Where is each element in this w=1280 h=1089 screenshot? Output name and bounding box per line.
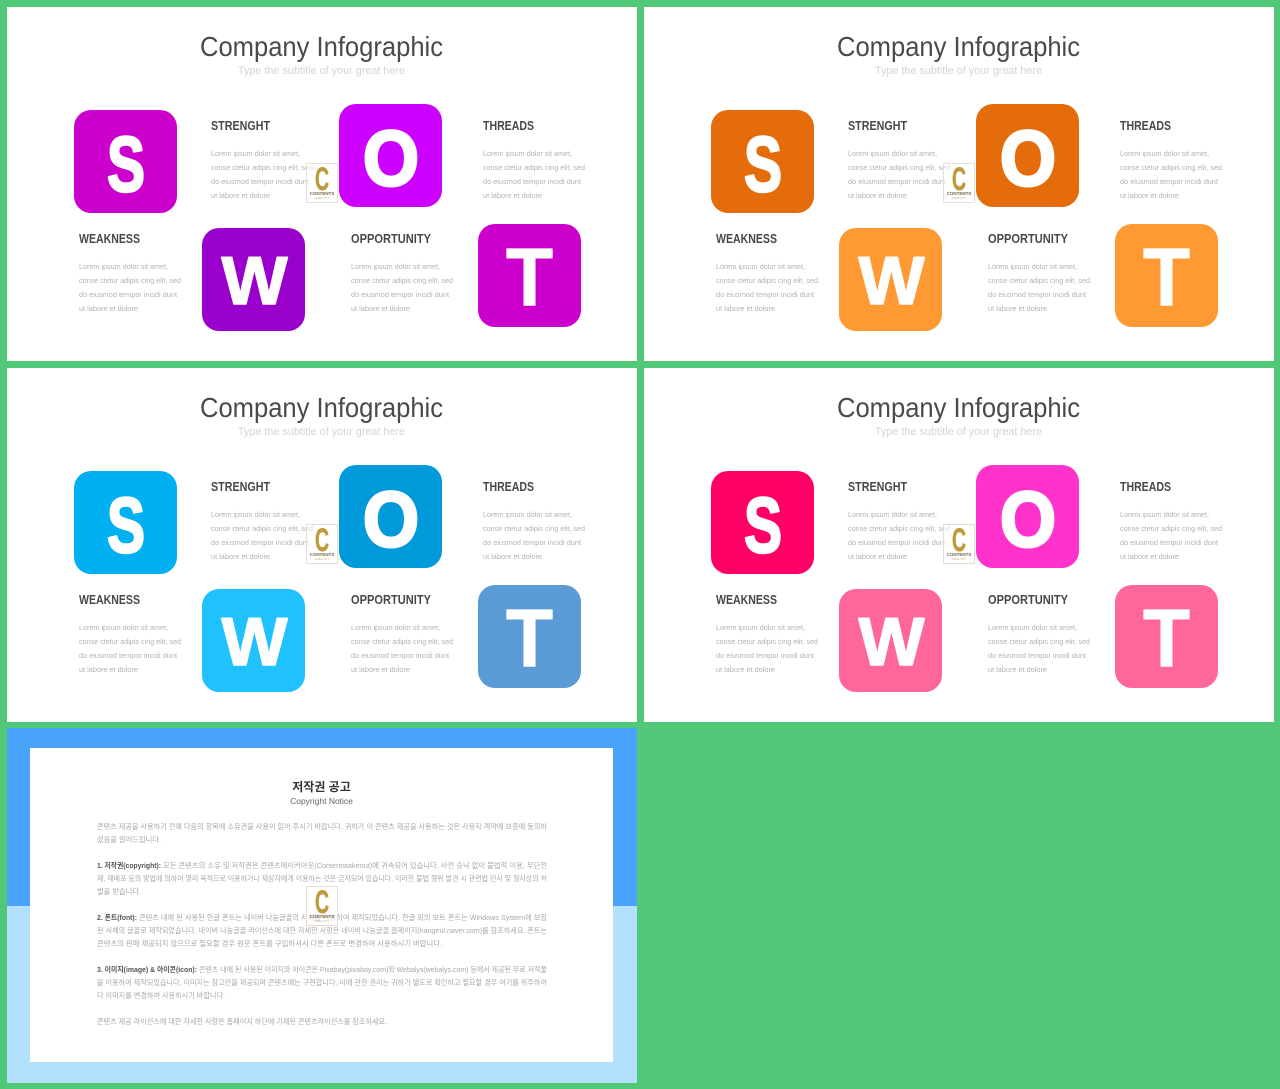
text block: weakness: conse ctetur adipis cing elit, sed [716,637,818,646]
text block: threads: Lorem ipsum dolor sit amet, [483,149,572,158]
text block: threads: THREADS [1120,480,1171,494]
text block: strenght: do eiusmod tempor incidi dunt [848,177,947,186]
tile T: T [506,232,553,323]
notice intro: 콘텐츠 제공을 사용하기 전에 다음의 항목에 소유권을 사용이 읽어 주시기 바랍니다. 귀하가 이 콘텐츠 제공을 사용하는 것은 사용자 계약에 보증에 동의하 [97,821,547,831]
notice section 2: font: 콘텐츠 내에 된 사용된 한글 폰트는 네이버 나눔글꼴의 서체를 사용하여 제작되었습니다. 한글 외의 보트 폰트는 Windows System에 보장 [139,912,547,922]
text block: strenght: conse ctetur adipis cing elit, sed [848,524,950,533]
text block: opportunity: conse ctetur adipis cing elit, sed [351,276,453,285]
tile W [839,228,942,331]
icon: contents logo stamp: FREE PPT [952,557,967,561]
tile O: O [363,114,419,202]
text block: opportunity: OPPORTUNITY [351,232,432,246]
title: Company Infographic [200,392,443,423]
text block: strenght [848,119,950,200]
notice section 1: copyright: 벌을 받습니다. [97,886,141,896]
text block: opportunity: do eiusmod tempor incidi dunt [988,651,1087,660]
text block: weakness: ut labore et dolore [79,665,138,674]
text block: threads: THREADS [483,480,534,494]
panel: orange SWOT slide [644,7,1274,361]
notice section 3: image and icon: 다 이미지를 변경하여 사용하시기 바랍니다. [97,990,225,1000]
text block: strenght: do eiusmod tempor incidi dunt [848,538,947,547]
tile O [976,465,1079,568]
text block: threads [1120,480,1222,561]
text block: weakness [716,593,818,674]
text block: strenght: do eiusmod tempor incidi dunt [211,177,310,186]
text block: strenght: Lorem ipsum dolor sit amet, [211,510,300,519]
notice intro [97,821,547,844]
notice section 3: image and icon: 콘텐츠 내에 된 사용된 이미지와 아이콘은 Pixabay(pixabay.com)와 Webalys(webalys.com) 등에서 제공된 무료 저작물 [199,964,547,974]
text block: opportunity: ut labore et dolore [988,304,1047,313]
tile S [711,471,814,574]
text block: weakness: WEAKNESS [716,232,777,246]
text block: threads: conse ctetur adipis cing elit, sed [1120,163,1222,172]
notice section 3: image and icon: 을 이용하여 제작되었습니다. 이미지는 참고만을 제공되며 콘텐츠에는 구현합니다. 이에 관한 권리는 귀하가 별도로 확인하고 필요할 경우 여기를 위주하여 [97,977,547,987]
notice section 1: copyright: 1. 저작권(copyright): [97,860,161,870]
tile W [839,589,942,692]
text block: strenght: conse ctetur adipis cing elit, sed [211,524,313,533]
icon: contents logo stamp: CONTENTS [310,914,334,919]
text block: weakness: conse ctetur adipis cing elit, sed [79,276,181,285]
tile W [202,589,305,692]
text block: threads [483,480,585,561]
text block: opportunity: do eiusmod tempor incidi dunt [988,290,1087,299]
tile O [976,104,1079,207]
tile T [478,224,581,327]
text block: opportunity: conse ctetur adipis cing elit, sed [351,637,453,646]
tile O: O [1000,475,1056,563]
tile W: W [858,604,925,680]
text block: threads [1120,119,1222,200]
icon: contents logo stamp: C [315,522,329,558]
panel: blue SWOT slide [7,368,637,722]
tile T [478,585,581,688]
text block: strenght: ut labore et dolore [848,191,907,200]
text block: strenght: ut labore et dolore [211,552,270,561]
text block: opportunity: ut labore et dolore [351,304,410,313]
text block: strenght: STRENGHT [848,480,907,494]
tile S: S [107,120,145,208]
text block: threads: conse ctetur adipis cing elit, sed [483,524,585,533]
tile T [1115,224,1218,327]
tile W: W [222,604,288,680]
text block: threads: ut labore et dolore [1120,191,1179,200]
text block: threads [483,119,585,200]
text block: weakness: conse ctetur adipis cing elit, sed [716,276,818,285]
icon: contents logo stamp: FREE PPT [315,919,330,923]
icon: contents logo stamp [944,522,974,564]
subtitle: Type the subtitle of your great here [238,65,405,77]
text block: strenght: conse ctetur adipis cing elit, sed [211,163,313,172]
text block: weakness: Lorem ipsum dolor sit amet, [79,623,168,632]
text block: weakness: do eiusmod tempor incidi dunt [79,651,178,660]
icon: contents logo stamp: C [315,161,329,197]
text block: strenght: ut labore et dolore [211,191,270,200]
text block: weakness [716,232,818,313]
text block: strenght: Lorem ipsum dolor sit amet, [211,149,300,158]
text block: weakness: do eiusmod tempor incidi dunt [716,651,815,660]
text block: opportunity: OPPORTUNITY [988,593,1069,607]
text block: weakness: Lorem ipsum dolor sit amet, [716,262,805,271]
icon: contents logo stamp: C [315,884,329,920]
text block: threads: ut labore et dolore [483,552,542,561]
copyright heading: 저작권 공고 [292,779,351,794]
text block: opportunity: Lorem ipsum dolor sit amet, [351,623,440,632]
text block: weakness: do eiusmod tempor incidi dunt [79,290,178,299]
text block: strenght: ut labore et dolore [848,552,907,561]
text block: strenght: STRENGHT [211,119,270,133]
text block: opportunity [988,593,1090,674]
text block: opportunity: conse ctetur adipis cing elit, sed [988,637,1090,646]
notice section 1: copyright: 모든 콘텐츠의 소유 및 저작권은 콘텐츠메이커아웃(Contentstakeout)에 귀속되어 있습니다. 사전 승낙 없이 불법적 이용, 무단전 [163,860,547,870]
text block: opportunity: Lorem ipsum dolor sit amet, [988,262,1077,271]
icon: contents logo stamp: CONTENTS [310,191,334,196]
text block: opportunity: Lorem ipsum dolor sit amet, [351,262,440,271]
text block: threads: conse ctetur adipis cing elit, sed [1120,524,1222,533]
text block: strenght [848,480,950,561]
text block: strenght: do eiusmod tempor incidi dunt [211,538,310,547]
text block: threads: THREADS [483,119,534,133]
tile W: W [222,243,288,319]
title: Company Infographic [837,31,1080,62]
icon: contents logo stamp [306,522,338,564]
text block: opportunity: ut labore et dolore [988,665,1047,674]
tile O [339,104,442,207]
text block: threads: THREADS [1120,119,1171,133]
panel: pink SWOT slide [644,368,1274,722]
text block: opportunity: do eiusmod tempor incidi dunt [351,290,450,299]
text block: weakness: conse ctetur adipis cing elit, sed [79,637,181,646]
text block: threads: Lorem ipsum dolor sit amet, [1120,510,1209,519]
icon: contents logo stamp: FREE PPT [952,196,967,200]
text block: weakness: WEAKNESS [79,593,140,607]
tile O: O [1000,114,1056,202]
panel: purple SWOT slide [7,7,637,361]
notice section 3: image and icon [97,964,547,1000]
notice section 2: font [97,912,547,948]
text block: opportunity: conse ctetur adipis cing elit, sed [988,276,1090,285]
text block: strenght: Lorem ipsum dolor sit amet, [848,149,937,158]
tile S: S [107,481,145,569]
tile S [74,471,177,574]
text block: opportunity [988,232,1090,313]
tile T: T [506,593,553,684]
tile T [1115,585,1218,688]
text block: threads: do eiusmod tempor incidi dunt [483,538,582,547]
text block: strenght [211,480,313,561]
tile S [74,110,177,213]
text block: opportunity [351,232,453,313]
text block: threads: ut labore et dolore [483,191,542,200]
tile S: S [744,481,782,569]
text block: threads: do eiusmod tempor incidi dunt [483,177,582,186]
tile S: S [744,120,782,208]
icon: contents logo stamp: CONTENTS [947,552,971,557]
text block: opportunity: do eiusmod tempor incidi dunt [351,651,450,660]
text block: threads: do eiusmod tempor incidi dunt [1120,538,1219,547]
text block: weakness: WEAKNESS [716,593,777,607]
tile S [711,110,814,213]
text block: opportunity: Lorem ipsum dolor sit amet, [988,623,1077,632]
notice section 2: font: 콘텐츠의 판매 제공되지 않으므로 필요할 경우 원문 폰트를 구입하셔서 다른 폰트로 변경하여 사용하시기 바랍니다. [97,938,442,948]
notice section 1: copyright: 재, 재배포 등의 방법에 의하여 영리 목적으로 이용하거나 제삼자에게 이용하는 것은 금지되어 있습니다. 이러한 불법 행위 발견 시 관련법 민사 및 형사상의 처 [97,873,547,883]
text block: weakness: do eiusmod tempor incidi dunt [716,290,815,299]
icon: contents logo stamp: FREE PPT [315,196,330,200]
notice section 2: font: 2. 폰트(font): [97,913,137,922]
text block: threads: Lorem ipsum dolor sit amet, [483,510,572,519]
text block: weakness [79,232,181,313]
text block: strenght: Lorem ipsum dolor sit amet, [848,510,937,519]
text block: threads: Lorem ipsum dolor sit amet, [1120,149,1209,158]
notice section 3: image and icon: 3. 이미지(image) & 아이콘(icon): [97,964,197,974]
icon: contents logo stamp: FREE PPT [315,557,330,561]
tile W [202,228,305,331]
icon: contents logo stamp [306,884,338,926]
notice intro: 셨음을 알려드립니다. [97,834,161,844]
text block: strenght: conse ctetur adipis cing elit, sed [848,163,950,172]
tile T: T [1143,232,1190,323]
title: Company Infographic [200,31,443,62]
text block: threads: conse ctetur adipis cing elit, sed [483,163,585,172]
text block: weakness: WEAKNESS [79,232,140,246]
notice section 2: font: 된 서체의 글꼴로 제작되었습니다. 네이버 나눔글꼴 라이선스에 대한 자세한 사항은 네이버 나눔글꼴 홈페이지(hangeul.naver.com)를 참조하세요. 폰트는 [97,925,547,935]
text block: threads: do eiusmod tempor incidi dunt [1120,177,1219,186]
text block: opportunity [351,593,453,674]
icon: contents logo stamp: C [952,161,966,197]
notice footer line: 콘텐츠 제공 라이선스에 대한 자세한 사항은 홈페이지 하단에 기재된 콘텐츠라이선스를 참조하세요. [97,1016,387,1026]
text block: opportunity: OPPORTUNITY [351,593,432,607]
tile O [339,465,442,568]
icon: contents logo stamp: CONTENTS [310,552,334,557]
copyright subheading: Copyright Notice [290,796,353,806]
title: Company Infographic [837,392,1080,423]
text block: weakness: ut labore et dolore [79,304,138,313]
text block: weakness: Lorem ipsum dolor sit amet, [716,623,805,632]
text block: opportunity: OPPORTUNITY [988,232,1069,246]
tile T: T [1143,593,1190,684]
text block: strenght: STRENGHT [211,480,270,494]
text block: weakness: Lorem ipsum dolor sit amet, [79,262,168,271]
text block: strenght: STRENGHT [848,119,907,133]
icon: contents logo stamp: CONTENTS [947,191,971,196]
subtitle: Type the subtitle of your great here [875,65,1042,77]
notice section 1: copyright [97,860,547,896]
text block: weakness: ut labore et dolore [716,304,775,313]
icon: contents logo stamp [944,161,974,202]
icon: contents logo stamp: C [952,522,966,558]
panel: copyright notice [7,728,637,1083]
text block: threads: ut labore et dolore [1120,552,1179,561]
tile W: W [858,243,925,319]
tile O: O [363,475,419,563]
subtitle: Type the subtitle of your great here [875,426,1042,438]
text block: weakness: ut labore et dolore [716,665,775,674]
text block: strenght [211,119,313,200]
subtitle: Type the subtitle of your great here [238,426,405,438]
text block: weakness [79,593,181,674]
text block: opportunity: ut labore et dolore [351,665,410,674]
icon: contents logo stamp [306,161,338,202]
